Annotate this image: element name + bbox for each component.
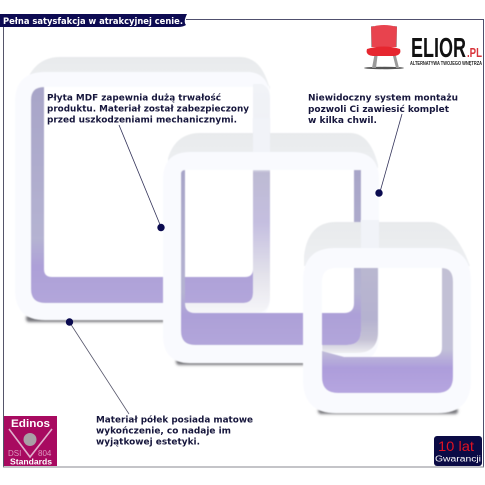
callout: MDF board <box>47 92 249 231</box>
badge: Edinos standards: 804 <box>38 449 52 458</box>
callout: matte finish: Materiał półek posiada matowe <box>96 414 253 426</box>
callout: MDF board: przed uszkodzeniami mechanicznymi. <box>47 116 237 126</box>
callout: mounting system <box>308 94 458 197</box>
callout: matte finish: wykończenie, co nadaje im <box>96 426 231 436</box>
medium shelf <box>163 118 379 365</box>
callout: matte finish: wyjątkowej estetyki. <box>96 438 200 448</box>
callout: mounting system: Niewidoczny system montażu <box>308 94 458 104</box>
callout: mounting system: pozwoli Ci zawiesić komplet <box>308 104 450 115</box>
callout: MDF board: produktu. Materiał został zabezpieczony <box>47 104 249 114</box>
heading banner: Pełna satysfakcja w atrakcyjnej cenie. <box>3 17 183 27</box>
badge: Edinos standards: Edinos <box>11 418 50 430</box>
callout: matte finish <box>66 318 253 448</box>
badge: 10 year warranty: 10 lat <box>438 438 474 454</box>
badge: Edinos standards: Standards <box>10 458 53 466</box>
icon: red chair <box>364 25 404 69</box>
large shelf <box>15 57 270 322</box>
badge: Edinos standards: DSI <box>8 449 21 458</box>
callout: MDF board: Płyta MDF zapewnia dużą trwałość <box>47 92 222 104</box>
badge: Edinos standards <box>4 416 57 466</box>
callout: mounting system: w kilka chwil. <box>308 116 377 126</box>
badge: 10 year warranty <box>434 436 482 466</box>
logo: Elior <box>364 25 482 69</box>
small shelf <box>303 220 471 414</box>
badge: 10 year warranty: Gwarancji <box>435 454 481 464</box>
